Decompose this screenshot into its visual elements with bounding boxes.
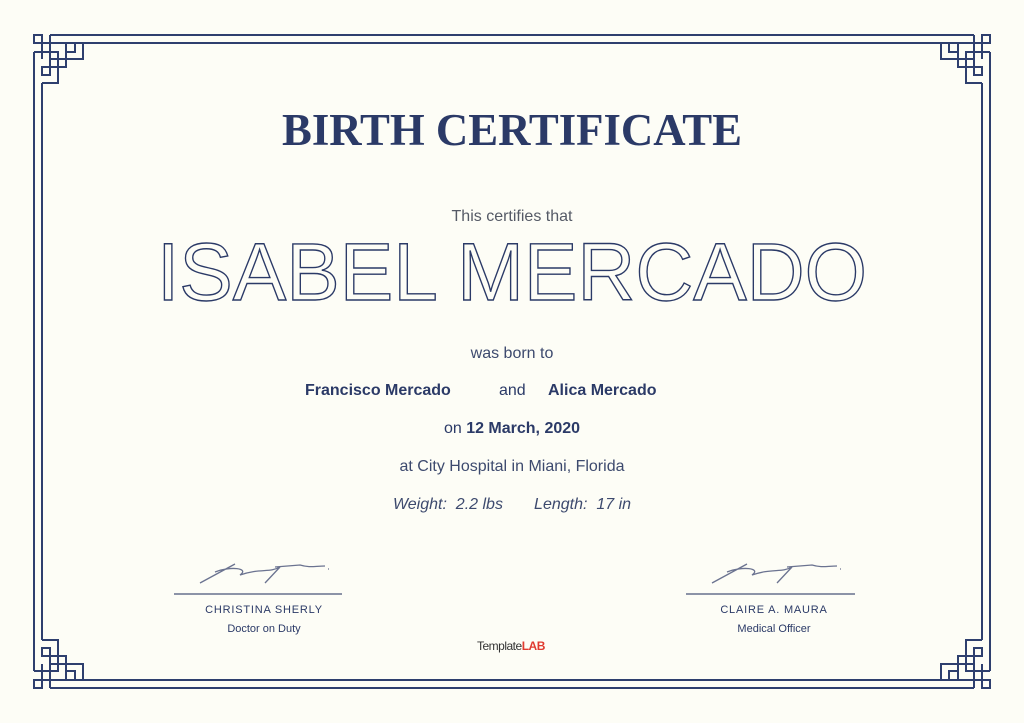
name: ISABEL MERCADO: [157, 227, 867, 318]
signature right: Medical Officer: [737, 623, 811, 635]
signature right: CLAIRE A. MAURA: [720, 604, 828, 616]
corner ornament: top-right: [941, 35, 990, 83]
parents: Alica Mercado: [548, 382, 657, 399]
place: at City Hospital in Miani, Florida: [400, 458, 625, 475]
corner ornament: top-left: [34, 35, 83, 83]
parents: Francisco Mercado: [305, 382, 451, 399]
signature left: Doctor on Duty: [227, 623, 301, 635]
parents: [305, 382, 657, 399]
logo: TemplateLAB: [477, 639, 546, 653]
corner ornament: bottom-right: [941, 640, 990, 688]
signature left: CHRISTINA SHERLY: [205, 604, 323, 616]
corner ornament: bottom-left: [34, 640, 83, 688]
parents: and: [499, 382, 526, 399]
born to: was born to: [470, 345, 553, 362]
title: BIRTH CERTIFICATE: [282, 105, 742, 155]
signature right: [686, 564, 855, 635]
weight and length: Weight: 2.2 lbs Length: 17 in: [393, 496, 631, 513]
date: on 12 March, 2020: [444, 420, 580, 437]
signature left: [174, 564, 342, 635]
intro text: This certifies that: [452, 208, 573, 225]
